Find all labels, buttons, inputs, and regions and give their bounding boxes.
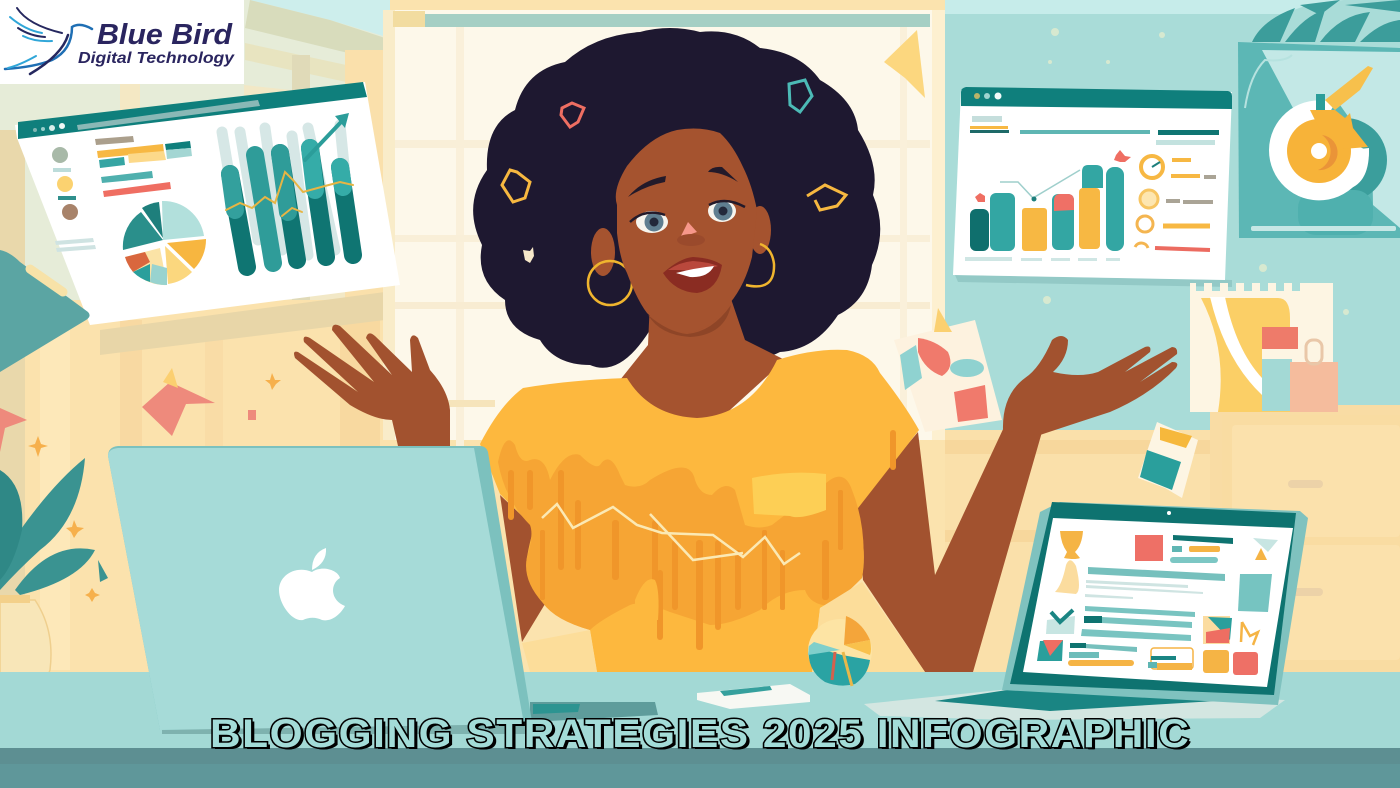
title: BLOGGING STRATEGIES 2025 INFOGRAPHIC: [210, 712, 1190, 756]
laptop screen: [1023, 511, 1293, 687]
calendar and shopping bags: [1190, 283, 1338, 412]
icon: key: [1287, 66, 1373, 183]
dashboard header text bars: [970, 116, 1219, 145]
desk front edge: [0, 748, 1400, 788]
drawers: [1222, 415, 1400, 671]
right laptop: [864, 502, 1308, 720]
neck: [620, 290, 785, 440]
icon: bags: [1262, 327, 1338, 412]
router: [697, 684, 810, 709]
dashboard header bar: [961, 87, 1232, 109]
legend bars: [95, 136, 192, 197]
face: [616, 129, 757, 333]
icon: apple logo: [279, 548, 345, 620]
right dashboard panel: [953, 87, 1232, 287]
icon: blue bird: [5, 8, 92, 74]
dashboard header bar: [18, 82, 367, 139]
sticky note with map shapes: [894, 308, 1002, 432]
plant at top right: [1252, 0, 1400, 42]
window: [383, 10, 945, 447]
gauges and indicators: [1135, 156, 1216, 250]
ears and earrings: [588, 206, 774, 305]
hair decorations: [502, 80, 846, 263]
hair: [473, 28, 880, 368]
mouth: [663, 257, 722, 293]
small pie chart object: [808, 616, 872, 686]
neck shadow: [648, 305, 731, 337]
left laptop: [108, 446, 658, 734]
bar chart with trend arrow: [222, 113, 353, 267]
eyes and brows: [628, 167, 745, 233]
bar chart: [965, 150, 1131, 261]
potted plant: [0, 458, 108, 706]
upper arm and forearm: [857, 425, 1042, 672]
left arm: [500, 495, 545, 642]
wall pennant and stars: [0, 368, 281, 602]
wall lamp: [0, 250, 90, 372]
target: [1269, 100, 1369, 200]
shirt chart blotches: [498, 430, 896, 650]
logo name: Blue Bird: [97, 19, 233, 51]
nose: [680, 222, 697, 238]
woman: [294, 28, 1177, 672]
left hand: [294, 325, 450, 446]
shirt: [480, 350, 919, 672]
sidebar stats: [52, 147, 96, 252]
logo tagline: Digital Technology: [78, 50, 235, 67]
pie chart: [121, 201, 206, 285]
lower background triangles: [522, 630, 597, 672]
left dashboard panel: [15, 82, 400, 325]
floating card: [1138, 422, 1198, 498]
right hand: [1003, 336, 1177, 435]
logo: [0, 0, 244, 84]
desk: [0, 672, 1400, 788]
key and target poster: [1238, 42, 1400, 238]
